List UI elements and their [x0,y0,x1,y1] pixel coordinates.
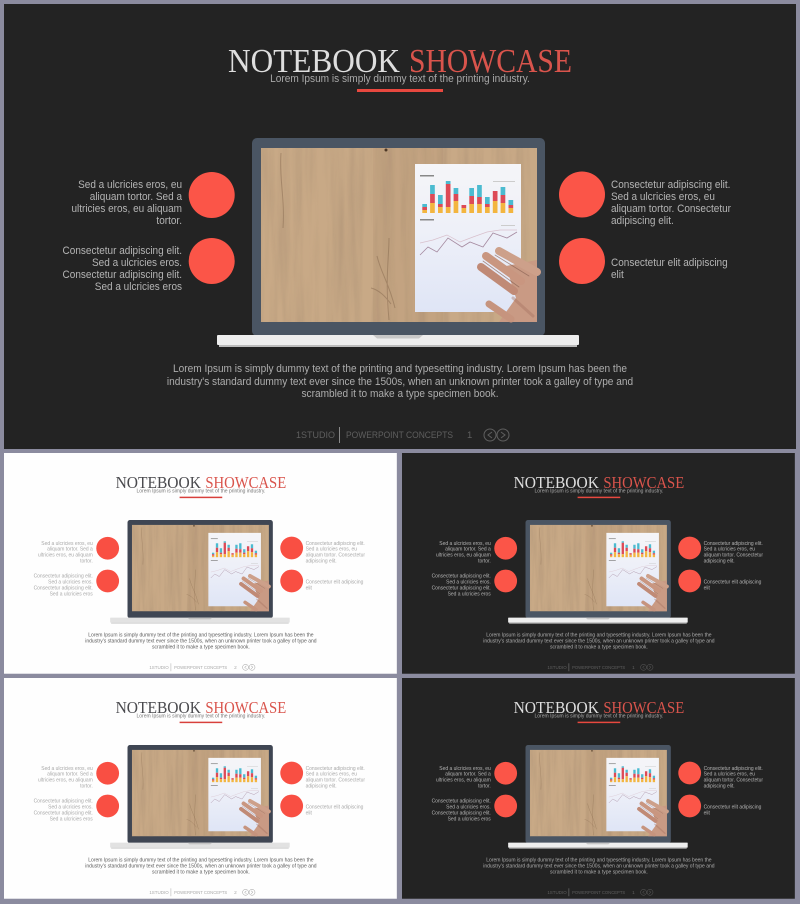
slide background [402,453,795,674]
circle 2 [494,795,517,817]
left text 2: Consectetur adipiscing elit. [63,245,182,257]
right text 1 [306,541,365,565]
laptop with photo of chart [508,745,688,849]
circle 2 [189,238,235,284]
title: SHOWCASE [205,473,286,492]
left text 1: ultricies eros, eu aliquam [38,777,93,784]
right text 1 [611,179,731,227]
slide background [4,4,796,449]
footer: 1STUDIO [547,665,567,670]
right text 1: aliquam tortor. Consectetur [704,777,763,784]
title: NOTEBOOK [116,473,201,492]
circle 1 [494,537,517,560]
right text 1 [704,541,763,565]
right text 1 [306,766,365,790]
right text 2 [704,579,761,591]
title: NOTEBOOK [116,698,201,717]
right text 2: Consectetur elit adipiscing [704,804,761,811]
right text 2: elit [704,585,710,591]
body paragraph [167,363,633,400]
footer: 1 [467,430,472,441]
left text 1: tortor. [80,558,93,565]
body paragraph: industry's standard dummy text ever since the 1500s, when an unknown printer took a galley of type and [167,376,633,388]
circle 1 [189,172,235,218]
title: NOTEBOOK [228,43,400,80]
circle 2 [96,795,119,817]
right text 2: Consectetur elit adipiscing [704,579,761,586]
right text 1: Sed a ulcricies eros, eu [306,772,357,778]
right text 1: aliquam tortor. Consectetur [306,552,365,559]
body paragraph: industry's standard dummy text ever since the 1500s, when an unknown printer took a galley of type and [85,638,317,645]
footer [149,888,255,896]
title [514,473,684,492]
left text 2: Sed a ulcricies eros. [92,257,182,269]
circle 2 [96,570,119,592]
right text 1: Sed a ulcricies eros, eu [704,772,755,778]
right text 1: Sed a ulcricies eros, eu [306,547,357,553]
left text 2: Sed a ulcricies eros [95,281,182,293]
slide 3: small dark [402,453,795,674]
left text 1: ultricies eros, eu aliquam [71,203,182,215]
title [514,698,684,717]
right text 1: Consectetur adipiscing elit. [611,179,730,191]
footer: POWERPOINT CONCEPTS [572,665,625,670]
subtitle: Lorem Ipsum is simply dummy text of the printing industry. [136,714,265,720]
left text 2: Consectetur adipiscing elit. [34,573,93,580]
left text 2: Consectetur adipiscing elit. [34,810,93,816]
slide background [4,678,397,899]
left text 2 [432,573,491,597]
left text 1: Sed a ulcricies eros, eu [41,541,93,547]
right text 2 [704,804,761,816]
right text 1: adipiscing elit. [306,783,337,790]
title: SHOWCASE [205,698,286,717]
left text 1 [71,179,182,227]
right text 1: Consectetur adipiscing elit. [704,541,763,547]
circle 4 [280,795,303,817]
left text 1: aliquam tortor. Sed a [90,191,182,203]
footer: 1 [632,890,635,895]
footer: POWERPOINT CONCEPTS [346,430,453,441]
left text 2: Consectetur adipiscing elit. [432,798,491,805]
body paragraph [85,632,317,651]
laptop with photo of chart [110,745,290,849]
body paragraph: scrambled it to make a type specimen book. [152,869,250,876]
body paragraph [483,632,715,651]
footer: 2 [234,890,237,895]
footer [547,888,653,896]
left text 1: Sed a ulcricies eros, eu [78,179,182,191]
right text 1: Sed a ulcricies eros, eu [611,191,715,203]
left text 2: Consectetur adipiscing elit. [432,573,491,580]
title underline [357,89,443,92]
left text 2 [34,573,93,597]
left text 2: Sed a ulcricies eros [448,816,491,822]
left text 1: Sed a ulcricies eros, eu [439,541,491,547]
footer: 1 [632,665,635,670]
body paragraph: Lorem Ipsum is simply dummy text of the printing and typesetting industry. Lorem Ipsum has been the [173,363,627,375]
body paragraph: scrambled it to make a type specimen book. [301,388,499,400]
right text 2: Consectetur elit adipiscing [306,579,363,586]
right text 2 [611,257,728,281]
slide 1: large dark showcase [4,4,796,449]
right text 1: Consectetur adipiscing elit. [306,541,365,547]
left text 1: aliquam tortor. Sed a [445,772,491,778]
left text 2 [34,798,93,822]
left text 1: tortor. [478,783,491,790]
subtitle: Lorem Ipsum is simply dummy text of the printing industry. [270,73,530,85]
left text 1 [38,766,93,790]
title: SHOWCASE [603,473,684,492]
left text 2: Sed a ulcricies eros [448,591,491,597]
laptop with photo of chart [508,520,688,624]
title: NOTEBOOK [514,473,599,492]
title underline [578,722,620,723]
body paragraph: scrambled it to make a type specimen book. [550,644,648,651]
left text 1: tortor. [156,215,182,227]
left text 2: Sed a ulcricies eros. [48,579,93,586]
footer: 1STUDIO [296,430,335,441]
left text 2 [63,245,182,293]
right text 2: elit [704,810,710,816]
body paragraph [85,857,317,876]
left text 1 [436,766,491,790]
right text 2: Consectetur elit adipiscing [306,804,363,811]
right text 2: elit [306,585,312,591]
right text 1: aliquam tortor. Consectetur [611,203,731,215]
circle 3 [559,172,605,218]
body paragraph: Lorem Ipsum is simply dummy text of the printing and typesetting industry. Lorem Ipsum has been the [88,857,314,864]
circle 4 [678,795,701,817]
right text 1: Consectetur adipiscing elit. [306,766,365,772]
slide 4: small white [4,678,397,899]
footer: POWERPOINT CONCEPTS [174,890,227,895]
left text 2: Consectetur adipiscing elit. [34,798,93,805]
left text 2: Consectetur adipiscing elit. [63,269,182,281]
left text 1: tortor. [80,783,93,790]
circle 3 [280,762,303,784]
slide 5: small dark [402,678,795,899]
right text 2: Consectetur elit adipiscing [611,257,728,269]
left text 2: Sed a ulcricies eros. [446,804,491,811]
body paragraph [483,857,715,876]
right text 2: elit [611,269,624,281]
body paragraph: scrambled it to make a type specimen book. [152,644,250,651]
left text 1: ultricies eros, eu aliquam [436,777,491,784]
slide 2: small white [4,453,397,674]
circle 1 [494,762,517,785]
circle 3 [678,762,701,784]
left text 1: Sed a ulcricies eros, eu [41,766,93,772]
body paragraph: industry's standard dummy text ever since the 1500s, when an unknown printer took a galley of type and [85,863,317,870]
slide background [4,453,397,674]
left text 2: Sed a ulcricies eros [50,591,93,597]
footer: 1STUDIO [149,890,169,895]
body paragraph: industry's standard dummy text ever since the 1500s, when an unknown printer took a galley of type and [483,863,715,870]
left text 1: ultricies eros, eu aliquam [436,552,491,559]
left text 1: ultricies eros, eu aliquam [38,552,93,559]
laptop with photo of chart [110,520,290,624]
body paragraph: scrambled it to make a type specimen book. [550,869,648,876]
footer: 1STUDIO [149,665,169,670]
circle 1 [96,537,119,560]
footer: POWERPOINT CONCEPTS [572,890,625,895]
footer [296,427,509,443]
body paragraph: Lorem Ipsum is simply dummy text of the printing and typesetting industry. Lorem Ipsum has been the [486,632,712,639]
body paragraph: Lorem Ipsum is simply dummy text of the printing and typesetting industry. Lorem Ipsum has been the [486,857,712,864]
left text 1: Sed a ulcricies eros, eu [439,766,491,772]
left text 1: tortor. [478,558,491,565]
circle 4 [280,570,303,592]
left text 2: Consectetur adipiscing elit. [34,585,93,591]
right text 1: adipiscing elit. [611,215,674,227]
right text 1: adipiscing elit. [704,558,735,565]
subtitle: Lorem Ipsum is simply dummy text of the printing industry. [534,489,663,495]
right text 1: adipiscing elit. [704,783,735,790]
left text 1 [436,541,491,565]
circle 1 [96,762,119,785]
circle 3 [678,537,701,559]
circle 3 [280,537,303,559]
left text 2: Sed a ulcricies eros. [48,804,93,811]
body paragraph: Lorem Ipsum is simply dummy text of the printing and typesetting industry. Lorem Ipsum has been the [88,632,314,639]
title: SHOWCASE [603,698,684,717]
left text 1: aliquam tortor. Sed a [47,547,93,553]
left text 2: Sed a ulcricies eros [50,816,93,822]
right text 1: adipiscing elit. [306,558,337,565]
left text 1 [38,541,93,565]
right text 1: aliquam tortor. Consectetur [306,777,365,784]
title [228,43,572,80]
title [116,698,286,717]
circle 4 [559,238,605,284]
title underline [180,497,222,498]
title underline [180,722,222,723]
circle 2 [494,570,517,592]
right text 2 [306,804,363,816]
subtitle: Lorem Ipsum is simply dummy text of the printing industry. [534,714,663,720]
title: SHOWCASE [409,43,572,80]
subtitle: Lorem Ipsum is simply dummy text of the printing industry. [136,489,265,495]
slide background [402,678,795,899]
left text 1: aliquam tortor. Sed a [47,772,93,778]
left text 2: Sed a ulcricies eros. [446,579,491,586]
laptop with photo of chart [217,138,579,347]
title: NOTEBOOK [514,698,599,717]
left text 2: Consectetur adipiscing elit. [432,585,491,591]
title [116,473,286,492]
footer: POWERPOINT CONCEPTS [174,665,227,670]
left text 1: aliquam tortor. Sed a [445,547,491,553]
right text 1 [704,766,763,790]
right text 1: aliquam tortor. Consectetur [704,552,763,559]
footer [149,663,255,671]
footer: 2 [234,665,237,670]
title underline [578,497,620,498]
left text 2: Consectetur adipiscing elit. [432,810,491,816]
right text 2 [306,579,363,591]
right text 1: Consectetur adipiscing elit. [704,766,763,772]
footer: 1STUDIO [547,890,567,895]
body paragraph: industry's standard dummy text ever since the 1500s, when an unknown printer took a galley of type and [483,638,715,645]
circle 4 [678,570,701,592]
footer [547,663,653,671]
right text 2: elit [306,810,312,816]
left text 2 [432,798,491,822]
right text 1: Sed a ulcricies eros, eu [704,547,755,553]
